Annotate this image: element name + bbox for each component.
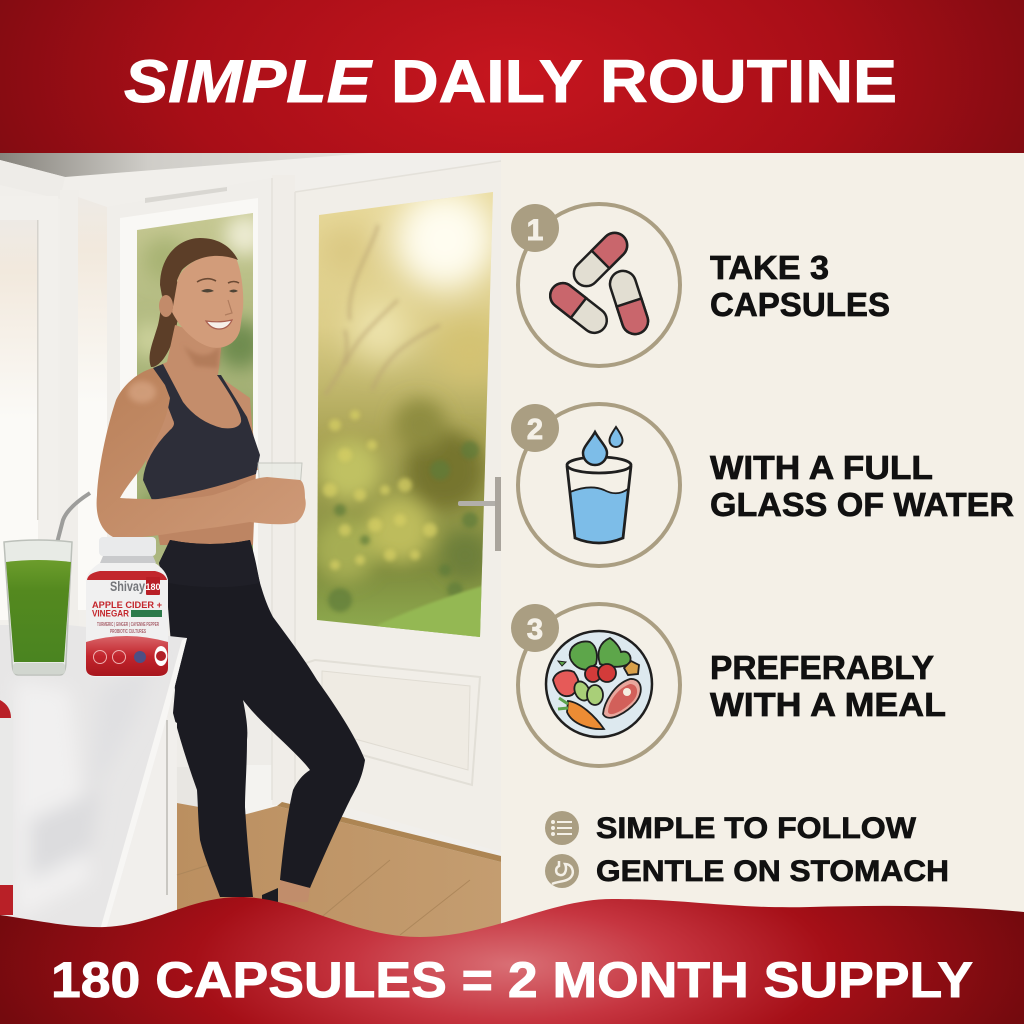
icon: checklist: [545, 811, 579, 845]
label: GENTLE ON STOMACH: [596, 855, 949, 888]
green smoothie glass: [4, 493, 90, 675]
product bottle: 180: [145, 582, 161, 592]
glass of water: [258, 463, 302, 515]
product bottle: Shivay: [110, 578, 145, 594]
door: [272, 161, 504, 852]
smile: [206, 320, 232, 329]
face: [172, 255, 243, 348]
icon: water glass in ring: 2: [527, 414, 543, 446]
door handle: [458, 477, 501, 551]
product bottle: [86, 537, 168, 677]
body: [86, 563, 168, 677]
benefit: gentle on stomach: [545, 854, 949, 888]
icon: meal plate in ring: 3: [527, 614, 543, 646]
kitchen counter: [0, 625, 187, 930]
icon: capsules in ring: 1: [527, 214, 543, 247]
arm and hand: [97, 368, 306, 538]
nose: [225, 300, 232, 315]
label: WITH A MEAL: [710, 686, 946, 723]
label: SIMPLE TO FOLLOW: [596, 812, 916, 845]
product bottle: VINEGAR: [92, 608, 129, 620]
title: SIMPLE: [124, 48, 373, 115]
sports top: [143, 364, 260, 500]
label: WITH A FULL: [710, 449, 933, 486]
header banner: [0, 0, 1024, 153]
eyes and brows: [197, 279, 239, 283]
product bottle: PROBIOTIC CULTURES: [110, 629, 146, 635]
leggings: [159, 540, 365, 897]
window frame and garden view: [120, 187, 258, 610]
neck and chest: [145, 325, 258, 480]
ankle and shoe: [278, 880, 310, 902]
cabinet side: [105, 717, 177, 927]
woman: [97, 238, 365, 905]
photo: kitchen scene: [0, 153, 504, 940]
product bottle: APPLE CIDER +: [92, 600, 162, 611]
hair: [160, 238, 238, 298]
footer text: 180 CAPSULES = 2 MONTH SUPPLY: [51, 952, 973, 1008]
footer wave banner: [0, 897, 1024, 1024]
midriff: [150, 470, 256, 545]
product bottle: TURMERIC | GINGER | CAYENNE PEPPER: [97, 622, 159, 628]
waistband: [159, 540, 260, 587]
right panel background: [501, 153, 1024, 943]
icon: capsules in ring: [511, 204, 680, 366]
icon: meal plate in ring: [511, 604, 680, 766]
ear: [159, 295, 173, 317]
label: PREFERABLY: [710, 649, 934, 686]
red band: [87, 571, 167, 580]
label: TAKE 3: [710, 249, 829, 286]
wood floor: [177, 802, 501, 940]
lower wall and skirting behind woman: [177, 610, 277, 817]
icon: water glass in ring: [511, 404, 680, 566]
icon: stomach: [545, 854, 579, 888]
label: CAPSULES: [710, 286, 890, 323]
ponytail: [150, 262, 182, 367]
benefit: simple to follow: [545, 811, 916, 845]
door lower panel: [300, 660, 480, 785]
second bottle at counter edge: [0, 700, 13, 915]
cap: [99, 537, 156, 556]
title: DAILY ROUTINE: [391, 48, 897, 115]
step 1: [511, 204, 890, 366]
step 2: [511, 404, 1014, 566]
label: GLASS OF WATER: [710, 486, 1014, 523]
step 3: [511, 604, 946, 766]
room wall: [0, 153, 501, 935]
